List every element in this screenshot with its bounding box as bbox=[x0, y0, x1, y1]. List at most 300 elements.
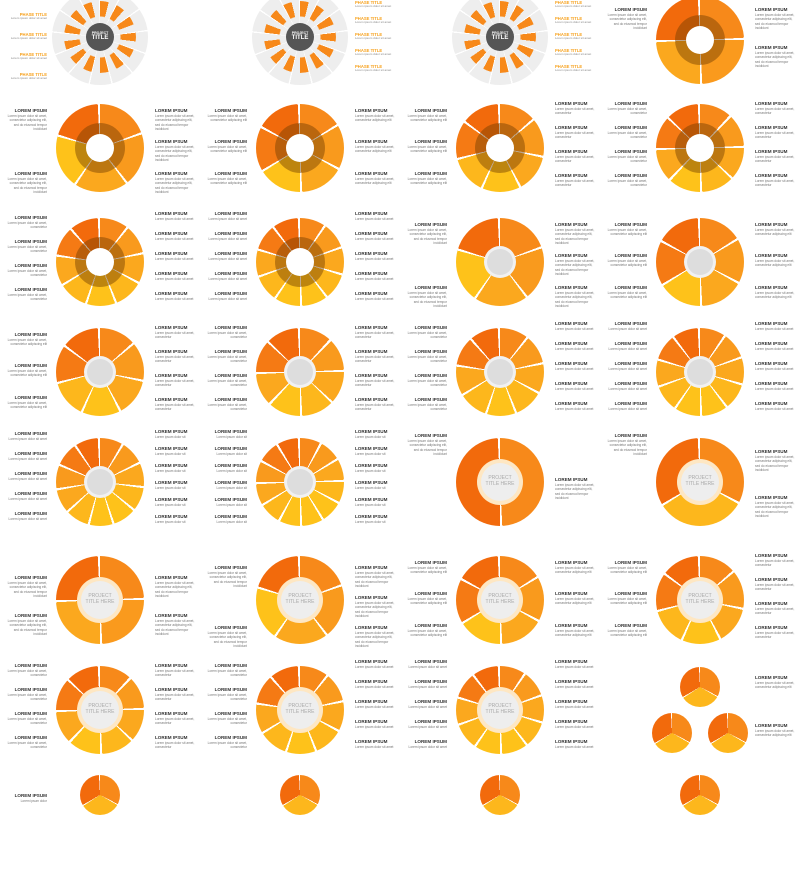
row 2: 9-segment star: Lorem ipsum dolor sit amet, consectetur bbox=[8, 221, 47, 229]
row 1: 8-segment star: LOREM IPSUM bbox=[755, 173, 787, 178]
row 1: 7-segment star: Lorem ipsum dolor sit amet, consectetur bbox=[555, 131, 594, 139]
row 3: 7-segment grey center: Lorem ipsum dolor sit amet, consectetur adipiscing elit bbox=[8, 401, 47, 409]
row 0: sun diagram 1: Lorem ipsum dolor sit amet bbox=[11, 76, 47, 80]
row 5: 5-segment project: Lorem ipsum dolor sit amet, consectetur adipiscing elit, sed do eiusmod tempor incididunt bbox=[355, 601, 394, 618]
row 2: 9-segment star: Lorem ipsum dolor sit amet bbox=[155, 217, 193, 221]
row 0: sun diagram 2 bbox=[252, 0, 392, 85]
row 4: 12-segment grey center: LOREM IPSUM bbox=[215, 463, 247, 468]
row 1: 5-segment star: Lorem ipsum dolor sit amet, consectetur adipiscing elit, sed do eiusmod tempor incididunt bbox=[8, 177, 47, 194]
row 5: 6-segment project: LOREM IPSUM bbox=[415, 623, 447, 628]
row 3: 10-segment grey center: LOREM IPSUM bbox=[615, 401, 647, 406]
row 6: 8-segment project: Lorem ipsum dolor sit amet, consectetur bbox=[155, 693, 194, 701]
row 5: 6-segment project: PROJECT bbox=[488, 593, 512, 599]
row 5: 6-segment project: Lorem ipsum dolor sit amet, consectetur adipiscing elit bbox=[408, 597, 447, 605]
row 4: 12-segment grey center: LOREM IPSUM bbox=[355, 463, 387, 468]
row 4: 12-segment grey center bbox=[214, 429, 388, 526]
row 1: 8-segment star: LOREM IPSUM bbox=[755, 125, 787, 130]
row 4: 11-segment grey center: LOREM IPSUM bbox=[15, 471, 47, 476]
row 5: 6-segment project: LOREM IPSUM bbox=[555, 591, 587, 596]
row 3: 9-segment grey center: Lorem ipsum dolor sit amet bbox=[555, 387, 593, 391]
row 1: 6-segment star: Lorem ipsum dolor sit amet, consectetur adipiscing elit bbox=[208, 145, 247, 153]
row 2: 9-segment star: LOREM IPSUM bbox=[155, 251, 187, 256]
row 2: 10-segment star: Lorem ipsum dolor sit amet bbox=[209, 277, 247, 281]
row 5: 6-segment project: Lorem ipsum dolor sit amet, consectetur adipiscing elit bbox=[555, 597, 594, 605]
row 5: 6-segment project bbox=[408, 556, 594, 644]
row 2: 10-segment star: LOREM IPSUM bbox=[215, 211, 247, 216]
row 4: 11-segment grey center: Lorem ipsum dolor sit amet bbox=[9, 497, 47, 501]
row 6: 9-segment project: Lorem ipsum dolor sit amet bbox=[355, 665, 393, 669]
row 6: small pie charts bbox=[652, 667, 794, 753]
row 6: 8-segment project: Lorem ipsum dolor sit amet, consectetur bbox=[155, 717, 194, 725]
row 0: sun diagram 3: PHASE TITLE bbox=[555, 0, 582, 5]
row 2: 5-segment grey center: Lorem ipsum dolor sit amet, consectetur adipiscing elit, sed do eiusmod tempor incididunt bbox=[555, 259, 594, 276]
row 2: 9-segment star: LOREM IPSUM bbox=[155, 291, 187, 296]
row 1: 8-segment star: Lorem ipsum dolor sit amet, consectetur bbox=[608, 131, 647, 139]
row 6: 8-segment project bbox=[8, 663, 194, 754]
row 5: 6-segment project: LOREM IPSUM bbox=[555, 623, 587, 628]
row 6: 9-segment project: LOREM IPSUM bbox=[215, 711, 247, 716]
row 2: 10-segment star: LOREM IPSUM bbox=[355, 211, 387, 216]
row 0: sun diagram 1 bbox=[11, 0, 148, 85]
row 2: 6-segment grey center: LOREM IPSUM bbox=[755, 222, 787, 227]
row 6: 8-segment project: LOREM IPSUM bbox=[15, 735, 47, 740]
row 2: 6-segment grey center: LOREM IPSUM bbox=[755, 285, 787, 290]
row 2: 10-segment star: Lorem ipsum dolor sit amet bbox=[209, 217, 247, 221]
row 3: 7-segment grey center: LOREM IPSUM bbox=[15, 395, 47, 400]
row 7: partial pies bbox=[14, 775, 720, 815]
row 4: 12-segment grey center: LOREM IPSUM bbox=[355, 446, 387, 451]
row 6: 10-segment project: PROJECT bbox=[488, 703, 512, 709]
row 0: sun diagram 3: PHASE TITLE bbox=[555, 32, 582, 37]
row 6: 9-segment project: LOREM IPSUM bbox=[355, 679, 387, 684]
row 3: 7-segment grey center: Lorem ipsum dolor sit amet, consectetur bbox=[155, 331, 194, 339]
row 6: 10-segment project: LOREM IPSUM bbox=[555, 719, 587, 724]
row 4: 12-segment grey center: LOREM IPSUM bbox=[355, 514, 387, 519]
row 5: 7-segment project: LOREM IPSUM bbox=[755, 553, 787, 558]
row 6: 10-segment project: Lorem ipsum dolor sit amet bbox=[409, 745, 447, 749]
row 3: 7-segment grey center: LOREM IPSUM bbox=[155, 397, 187, 402]
row 4: 3-segment project: PROJECT bbox=[688, 475, 712, 481]
row 4: 11-segment grey center: Lorem ipsum dolor sit bbox=[155, 452, 185, 456]
row 1: 7-segment star: Lorem ipsum dolor sit amet, consectetur adipiscing elit bbox=[408, 177, 447, 185]
row 6: 8-segment project: PROJECT bbox=[88, 703, 112, 709]
row 1: 7-segment star: Lorem ipsum dolor sit amet, consectetur adipiscing elit bbox=[408, 145, 447, 153]
row 2: 10-segment star: Lorem ipsum dolor sit amet bbox=[355, 257, 393, 261]
row 7: partial pies: Lorem ipsum dolor bbox=[21, 799, 47, 803]
row 5: 5-segment project: Lorem ipsum dolor sit amet, consectetur adipiscing elit, sed do eiusmod tempor incididunt bbox=[208, 571, 247, 588]
row 0: sun diagram 3: Lorem ipsum dolor sit amet bbox=[555, 36, 591, 40]
row 6: 8-segment project: Lorem ipsum dolor sit amet, consectetur bbox=[8, 717, 47, 725]
row 1: 5-segment star: Lorem ipsum dolor sit amet, consectetur adipiscing elit, sed do eiusmod tempor incididunt bbox=[8, 114, 47, 131]
row 4: 12-segment grey center: LOREM IPSUM bbox=[355, 429, 387, 434]
row 4: 11-segment grey center: Lorem ipsum dolor sit amet bbox=[9, 477, 47, 481]
row 5: 6-segment project: Lorem ipsum dolor sit amet, consectetur adipiscing elit bbox=[408, 629, 447, 637]
row 1: 6-segment star: Lorem ipsum dolor sit amet, consectetur adipiscing elit bbox=[355, 114, 394, 122]
row 2: 6-segment grey center: Lorem ipsum dolor sit amet, consectetur adipiscing elit bbox=[755, 259, 794, 267]
row 6: 10-segment project: Lorem ipsum dolor sit amet bbox=[555, 705, 593, 709]
row 5: 5-segment project: LOREM IPSUM bbox=[355, 625, 387, 630]
row 1: 5-segment star: Lorem ipsum dolor sit amet, consectetur adipiscing elit, sed do eiusmod tempor incididunt bbox=[155, 177, 194, 194]
row 1: 7-segment star: LOREM IPSUM bbox=[555, 149, 587, 154]
row 4: 11-segment grey center: LOREM IPSUM bbox=[155, 514, 187, 519]
row 3: 10-segment grey center: Lorem ipsum dolor sit amet bbox=[755, 367, 793, 371]
row 0: 4-segment star: Lorem ipsum dolor sit amet, consectetur adipiscing elit, sed do eiusmod tempor incididunt bbox=[755, 51, 794, 68]
row 5: 7-segment project: PROJECT bbox=[688, 593, 712, 599]
row 2: 9-segment star: LOREM IPSUM bbox=[15, 263, 47, 268]
row 6: 8-segment project: Lorem ipsum dolor sit amet, consectetur bbox=[8, 741, 47, 749]
row 0: sun diagram 3: Lorem ipsum dolor sit amet bbox=[555, 4, 591, 8]
row 2: 5-segment grey center: Lorem ipsum dolor sit amet, consectetur adipiscing elit, sed do eiusmod tempor incididunt bbox=[408, 291, 447, 308]
row 4: 11-segment grey center: Lorem ipsum dolor sit amet bbox=[9, 457, 47, 461]
row 6: 9-segment project: LOREM IPSUM bbox=[355, 719, 387, 724]
row 1: 8-segment star: Lorem ipsum dolor sit amet, consectetur bbox=[755, 107, 794, 115]
row 4: 2-segment project: PROJECT bbox=[488, 475, 512, 481]
row 4: 3-segment project: LOREM IPSUM bbox=[615, 433, 647, 438]
row 2: 5-segment grey center: Lorem ipsum dolor sit amet, consectetur adipiscing elit, sed do eiusmod tempor incididunt bbox=[408, 228, 447, 245]
row 4: 11-segment grey center: LOREM IPSUM bbox=[155, 429, 187, 434]
row 4: 12-segment grey center: Lorem ipsum dolor sit bbox=[355, 520, 385, 524]
row 0: sun diagram 3: Lorem ipsum dolor sit amet bbox=[555, 68, 591, 72]
row 5: 4-segment project: PROJECT bbox=[88, 593, 112, 599]
row 1: 5-segment star: LOREM IPSUM bbox=[155, 171, 187, 176]
row 1: 8-segment star: Lorem ipsum dolor sit amet, consectetur bbox=[608, 155, 647, 163]
row 1: 8-segment star: LOREM IPSUM bbox=[615, 101, 647, 106]
row 5: 5-segment project: Lorem ipsum dolor sit amet, consectetur adipiscing elit, sed do eiusmod tempor incididunt bbox=[355, 571, 394, 588]
row 6: small pie charts: LOREM IPSUM bbox=[755, 675, 787, 680]
row 6: 8-segment project: Lorem ipsum dolor sit amet, consectetur bbox=[155, 669, 194, 677]
row 3: 10-segment grey center bbox=[608, 321, 794, 416]
row 4: 11-segment grey center: Lorem ipsum dolor sit bbox=[155, 486, 185, 490]
row 6: small pie charts: LOREM IPSUM bbox=[755, 723, 787, 728]
row 4: 12-segment grey center: LOREM IPSUM bbox=[215, 429, 247, 434]
row 2: 9-segment star: LOREM IPSUM bbox=[15, 215, 47, 220]
row 5: 4-segment project: Lorem ipsum dolor sit amet, consectetur adipiscing elit, sed do eiusmod tempor incididunt bbox=[8, 581, 47, 598]
row 3: 9-segment grey center: Lorem ipsum dolor sit amet, consectetur bbox=[408, 355, 447, 363]
row 0: sun diagram 1: Lorem ipsum dolor sit amet bbox=[11, 36, 47, 40]
row 1: 6-segment star: LOREM IPSUM bbox=[355, 108, 387, 113]
row 5: 6-segment project: Lorem ipsum dolor sit amet, consectetur adipiscing elit bbox=[555, 629, 594, 637]
row 5: 7-segment project: Lorem ipsum dolor sit amet, consectetur adipiscing elit bbox=[608, 566, 647, 574]
row 0: sun diagram 1: PHASE TITLE bbox=[20, 12, 47, 17]
row 1: 8-segment star: Lorem ipsum dolor sit amet, consectetur bbox=[608, 179, 647, 187]
row 2: 6-segment grey center: Lorem ipsum dolor sit amet, consectetur adipiscing elit bbox=[755, 228, 794, 236]
row 3: 10-segment grey center: LOREM IPSUM bbox=[615, 361, 647, 366]
row 0: sun diagram 3: TITLE bbox=[492, 35, 508, 41]
row 4: 11-segment grey center: LOREM IPSUM bbox=[155, 463, 187, 468]
row 3: 9-segment grey center: LOREM IPSUM bbox=[555, 361, 587, 366]
row 2: 9-segment star: Lorem ipsum dolor sit amet, consectetur bbox=[8, 269, 47, 277]
row 3: 8-segment grey center: LOREM IPSUM bbox=[355, 325, 387, 330]
row 3: 9-segment grey center: LOREM IPSUM bbox=[415, 397, 447, 402]
row 6: 9-segment project: Lorem ipsum dolor sit amet bbox=[355, 705, 393, 709]
row 2: 10-segment star: LOREM IPSUM bbox=[355, 271, 387, 276]
row 3: 8-segment grey center: LOREM IPSUM bbox=[215, 349, 247, 354]
row 3: 8-segment grey center: Lorem ipsum dolor sit amet, consectetur bbox=[355, 331, 394, 339]
row 6: 8-segment project: Lorem ipsum dolor sit amet, consectetur bbox=[155, 741, 194, 749]
row 5: 6-segment project: LOREM IPSUM bbox=[415, 560, 447, 565]
row 5: 7-segment project: Lorem ipsum dolor sit amet, consectetur bbox=[755, 607, 794, 615]
row 1: 5-segment star: Lorem ipsum dolor sit amet, consectetur adipiscing elit, sed do eiusmod tempor incididunt bbox=[155, 114, 194, 131]
row 1: 8-segment star: Lorem ipsum dolor sit amet, consectetur bbox=[755, 179, 794, 187]
row 3: 9-segment grey center: LOREM IPSUM bbox=[555, 341, 587, 346]
row 3: 7-segment grey center: LOREM IPSUM bbox=[15, 363, 47, 368]
row 1: 7-segment star: Lorem ipsum dolor sit amet, consectetur bbox=[555, 107, 594, 115]
row 6: 8-segment project: LOREM IPSUM bbox=[15, 687, 47, 692]
row 5: 4-segment project: Lorem ipsum dolor sit amet, consectetur adipiscing elit, sed do eiusmod tempor incididunt bbox=[155, 619, 194, 636]
row 4: 3-segment project: Lorem ipsum dolor sit amet, consectetur adipiscing elit, sed do eiusmod tempor incididunt bbox=[755, 455, 794, 472]
row 6: 8-segment project: LOREM IPSUM bbox=[155, 687, 187, 692]
row 4: 2-segment project: Lorem ipsum dolor sit amet, consectetur adipiscing elit, sed do eiusmod tempor incididunt bbox=[555, 483, 594, 500]
row 6: 9-segment project: PROJECT bbox=[288, 703, 312, 709]
row 4: 2-segment project bbox=[408, 433, 594, 526]
row 3: 9-segment grey center: Lorem ipsum dolor sit amet bbox=[555, 367, 593, 371]
row 2: 6-segment grey center: Lorem ipsum dolor sit amet, consectetur adipiscing elit bbox=[608, 291, 647, 299]
row 4: 12-segment grey center: Lorem ipsum dolor sit bbox=[217, 469, 247, 473]
row 2: 9-segment star: LOREM IPSUM bbox=[15, 287, 47, 292]
row 2: 9-segment star: LOREM IPSUM bbox=[155, 271, 187, 276]
row 4: 3-segment project: Lorem ipsum dolor sit amet, consectetur adipiscing elit, sed do eiusmod tempor incididunt bbox=[608, 439, 647, 456]
row 5: 4-segment project: Lorem ipsum dolor sit amet, consectetur adipiscing elit, sed do eiusmod tempor incididunt bbox=[155, 581, 194, 598]
row 0: sun diagram 2: PHASE TITLE bbox=[355, 0, 382, 5]
row 0: sun diagram 1: PHASE TITLE bbox=[20, 52, 47, 57]
row 4: 12-segment grey center: Lorem ipsum dolor sit bbox=[217, 435, 247, 439]
row 1: 5-segment star: Lorem ipsum dolor sit amet, consectetur adipiscing elit, sed do eiusmod tempor incididunt bbox=[155, 145, 194, 162]
row 4: 11-segment grey center: Lorem ipsum dolor sit bbox=[155, 435, 185, 439]
row 0: sun diagram 2: Lorem ipsum dolor sit amet bbox=[355, 20, 391, 24]
row 0: sun diagram 1: Lorem ipsum dolor sit amet bbox=[11, 16, 47, 20]
row 3: 8-segment grey center bbox=[208, 325, 394, 416]
row 1: 8-segment star: LOREM IPSUM bbox=[615, 173, 647, 178]
row 6: 9-segment project: LOREM IPSUM bbox=[355, 659, 387, 664]
row 0: sun diagram 2: PHASE TITLE bbox=[355, 32, 382, 37]
row 2: 6-segment grey center: Lorem ipsum dolor sit amet, consectetur adipiscing elit bbox=[608, 228, 647, 236]
row 5: 4-segment project: Lorem ipsum dolor sit amet, consectetur adipiscing elit, sed do eiusmod tempor incididunt bbox=[8, 619, 47, 636]
row 6: 9-segment project: Lorem ipsum dolor sit amet, consectetur bbox=[208, 717, 247, 725]
row 6: 9-segment project: Lorem ipsum dolor sit amet bbox=[355, 685, 393, 689]
row 3: 7-segment grey center: Lorem ipsum dolor sit amet, consectetur bbox=[155, 355, 194, 363]
row 4: 12-segment grey center: LOREM IPSUM bbox=[215, 497, 247, 502]
row 0: sun diagram 2: PHASE TITLE bbox=[355, 16, 382, 21]
row 0: sun diagram 1: PHASE TITLE bbox=[20, 32, 47, 37]
row 3: 9-segment grey center: Lorem ipsum dolor sit amet, consectetur bbox=[408, 403, 447, 411]
row 6: 10-segment project: LOREM IPSUM bbox=[415, 679, 447, 684]
row 5: 5-segment project: LOREM IPSUM bbox=[215, 565, 247, 570]
row 4: 3-segment project: LOREM IPSUM bbox=[755, 449, 787, 454]
row 6: 8-segment project: Lorem ipsum dolor sit amet, consectetur bbox=[8, 693, 47, 701]
row 4: 11-segment grey center: Lorem ipsum dolor sit bbox=[155, 503, 185, 507]
row 6: 10-segment project bbox=[408, 659, 594, 754]
row 1: 7-segment star: LOREM IPSUM bbox=[415, 108, 447, 113]
row 1: 7-segment star: LOREM IPSUM bbox=[415, 171, 447, 176]
row 5: 7-segment project: LOREM IPSUM bbox=[755, 577, 787, 582]
row 3: 10-segment grey center: LOREM IPSUM bbox=[755, 361, 787, 366]
row 4: 12-segment grey center: LOREM IPSUM bbox=[215, 446, 247, 451]
row 5: 7-segment project: Lorem ipsum dolor sit amet, consectetur adipiscing elit bbox=[608, 597, 647, 605]
row 6: 10-segment project: LOREM IPSUM bbox=[415, 719, 447, 724]
row 6: 9-segment project: LOREM IPSUM bbox=[355, 699, 387, 704]
row 2: 9-segment star: Lorem ipsum dolor sit amet bbox=[155, 257, 193, 261]
row 3: 9-segment grey center: LOREM IPSUM bbox=[555, 401, 587, 406]
row 6: 10-segment project: LOREM IPSUM bbox=[555, 659, 587, 664]
row 4: 12-segment grey center: LOREM IPSUM bbox=[355, 480, 387, 485]
row 5: 7-segment project: LOREM IPSUM bbox=[615, 560, 647, 565]
row 4: 12-segment grey center: Lorem ipsum dolor sit bbox=[355, 486, 385, 490]
row 2: 6-segment grey center: LOREM IPSUM bbox=[615, 285, 647, 290]
row 3: 10-segment grey center: Lorem ipsum dolor sit amet bbox=[755, 327, 793, 331]
row 6: 10-segment project: Lorem ipsum dolor sit amet bbox=[409, 685, 447, 689]
row 5: 5-segment project: TITLE HERE bbox=[286, 599, 314, 605]
row 1: 8-segment star: Lorem ipsum dolor sit amet, consectetur bbox=[755, 131, 794, 139]
row 3: 10-segment grey center: Lorem ipsum dolor sit amet bbox=[609, 407, 647, 411]
row 2: 9-segment star: Lorem ipsum dolor sit amet, consectetur bbox=[8, 293, 47, 301]
row 2: 10-segment star: Lorem ipsum dolor sit amet bbox=[209, 237, 247, 241]
row 3: 9-segment grey center: LOREM IPSUM bbox=[415, 325, 447, 330]
row 0: 4-segment star bbox=[608, 0, 794, 84]
row 4: 11-segment grey center: LOREM IPSUM bbox=[155, 446, 187, 451]
row 5: 4-segment project: LOREM IPSUM bbox=[155, 575, 187, 580]
row 6: 10-segment project: Lorem ipsum dolor sit amet bbox=[555, 685, 593, 689]
row 5: 7-segment project: LOREM IPSUM bbox=[755, 625, 787, 630]
row 0: sun diagram 1: PROJECT bbox=[92, 31, 108, 35]
row 6: 9-segment project: LOREM IPSUM bbox=[215, 735, 247, 740]
row 2: 6-segment grey center: Lorem ipsum dolor sit amet, consectetur adipiscing elit bbox=[755, 291, 794, 299]
row 1: 7-segment star bbox=[408, 101, 594, 192]
row 3: 10-segment grey center: LOREM IPSUM bbox=[755, 381, 787, 386]
row 4: 12-segment grey center: Lorem ipsum dolor sit bbox=[355, 435, 385, 439]
row 0: sun diagram 1: Lorem ipsum dolor sit amet bbox=[11, 56, 47, 60]
row 3: 9-segment grey center: Lorem ipsum dolor sit amet, consectetur bbox=[408, 331, 447, 339]
row 0: 4-segment star: LOREM IPSUM bbox=[755, 45, 787, 50]
row 2: 9-segment star: Lorem ipsum dolor sit amet, consectetur bbox=[8, 245, 47, 253]
row 3: 9-segment grey center bbox=[408, 321, 594, 416]
row 4: 3-segment project: Lorem ipsum dolor sit amet, consectetur adipiscing elit, sed do eiusmod tempor incididunt bbox=[755, 501, 794, 518]
row 4: 2-segment project: LOREM IPSUM bbox=[555, 477, 587, 482]
row 0: 4-segment star: LOREM IPSUM bbox=[755, 7, 787, 12]
row 6: 8-segment project: LOREM IPSUM bbox=[155, 711, 187, 716]
row 6: 10-segment project: LOREM IPSUM bbox=[555, 739, 587, 744]
row 5: 7-segment project: LOREM IPSUM bbox=[755, 601, 787, 606]
row 1: 6-segment star: LOREM IPSUM bbox=[215, 108, 247, 113]
row 1: 6-segment star: Lorem ipsum dolor sit amet, consectetur adipiscing elit bbox=[208, 114, 247, 122]
row 2: 6-segment grey center: Lorem ipsum dolor sit amet, consectetur adipiscing elit bbox=[608, 259, 647, 267]
row 0: sun diagram 2: Lorem ipsum dolor sit amet bbox=[355, 52, 391, 56]
row 3: 7-segment grey center: Lorem ipsum dolor sit amet, consectetur bbox=[155, 379, 194, 387]
row 6: 9-segment project: LOREM IPSUM bbox=[215, 663, 247, 668]
row 3: 8-segment grey center: LOREM IPSUM bbox=[355, 373, 387, 378]
row 0: sun diagram 3 bbox=[452, 0, 592, 85]
row 6: 10-segment project: LOREM IPSUM bbox=[555, 679, 587, 684]
row 2: 10-segment star: Lorem ipsum dolor sit amet bbox=[355, 237, 393, 241]
row 5: 6-segment project: TITLE HERE bbox=[486, 599, 514, 605]
row 5: 6-segment project: LOREM IPSUM bbox=[555, 560, 587, 565]
row 1: 6-segment star: LOREM IPSUM bbox=[215, 139, 247, 144]
row 2: 6-segment grey center: LOREM IPSUM bbox=[755, 253, 787, 258]
row 6: 10-segment project: TITLE HERE bbox=[486, 709, 514, 715]
row 0: sun diagram 3: Lorem ipsum dolor sit amet bbox=[555, 20, 591, 24]
row 6: 9-segment project: LOREM IPSUM bbox=[215, 687, 247, 692]
row 3: 10-segment grey center: LOREM IPSUM bbox=[615, 341, 647, 346]
row 3: 8-segment grey center: LOREM IPSUM bbox=[215, 325, 247, 330]
row 0: sun diagram 2: PROJECT bbox=[292, 31, 308, 35]
row 4: 12-segment grey center: LOREM IPSUM bbox=[355, 497, 387, 502]
row 6: 10-segment project: Lorem ipsum dolor sit amet bbox=[555, 725, 593, 729]
row 6: 8-segment project: LOREM IPSUM bbox=[155, 735, 187, 740]
row 6: 10-segment project: LOREM IPSUM bbox=[415, 739, 447, 744]
row 4: 12-segment grey center: Lorem ipsum dolor sit bbox=[355, 469, 385, 473]
row 1: 7-segment star: LOREM IPSUM bbox=[555, 173, 587, 178]
row 3: 7-segment grey center: LOREM IPSUM bbox=[15, 332, 47, 337]
row 1: 6-segment star: LOREM IPSUM bbox=[355, 171, 387, 176]
row 6: 9-segment project: Lorem ipsum dolor sit amet bbox=[355, 745, 393, 749]
row 1: 8-segment star bbox=[608, 101, 794, 192]
row 5: 5-segment project: LOREM IPSUM bbox=[355, 565, 387, 570]
row 4: 11-segment grey center: LOREM IPSUM bbox=[155, 497, 187, 502]
row 3: 7-segment grey center: LOREM IPSUM bbox=[155, 373, 187, 378]
row 3: 8-segment grey center: Lorem ipsum dolor sit amet, consectetur bbox=[355, 355, 394, 363]
row 2: 9-segment star: LOREM IPSUM bbox=[155, 211, 187, 216]
row 4: 11-segment grey center: Lorem ipsum dolor sit amet bbox=[9, 437, 47, 441]
row 5: 5-segment project bbox=[208, 556, 394, 648]
row 0: 4-segment star: Lorem ipsum dolor sit amet, consectetur adipiscing elit, sed do eiusmod tempor incididunt bbox=[755, 13, 794, 30]
row 3: 8-segment grey center: Lorem ipsum dolor sit amet, consectetur bbox=[208, 331, 247, 339]
row 2: 9-segment star: Lorem ipsum dolor sit amet bbox=[155, 297, 193, 301]
row 4: 12-segment grey center: Lorem ipsum dolor sit bbox=[217, 452, 247, 456]
row 3: 9-segment grey center: Lorem ipsum dolor sit amet, consectetur bbox=[408, 379, 447, 387]
row 3: 8-segment grey center: LOREM IPSUM bbox=[215, 397, 247, 402]
row 2: 9-segment star bbox=[8, 211, 194, 306]
row 2: 10-segment star: Lorem ipsum dolor sit amet bbox=[209, 257, 247, 261]
row 5: 5-segment project: PROJECT bbox=[288, 593, 312, 599]
row 3: 7-segment grey center: Lorem ipsum dolor sit amet, consectetur adipiscing elit bbox=[8, 338, 47, 346]
row 6: 8-segment project: Lorem ipsum dolor sit amet, consectetur bbox=[8, 669, 47, 677]
row 4: 2-segment project: TITLE HERE bbox=[486, 481, 514, 487]
row 3: 9-segment grey center: Lorem ipsum dolor sit amet bbox=[555, 327, 593, 331]
row 0: sun diagram 2: Lorem ipsum dolor sit amet bbox=[355, 36, 391, 40]
row 5: 7-segment project: Lorem ipsum dolor sit amet, consectetur bbox=[755, 631, 794, 639]
row 6: 10-segment project: Lorem ipsum dolor sit amet bbox=[409, 665, 447, 669]
row 0: sun diagram 1: PHASE TITLE bbox=[20, 72, 47, 77]
row 7: partial pies: LOREM IPSUM bbox=[15, 793, 47, 798]
row 2: 9-segment star: Lorem ipsum dolor sit amet bbox=[155, 237, 193, 241]
row 1: 7-segment star: LOREM IPSUM bbox=[555, 101, 587, 106]
row 6: 10-segment project: Lorem ipsum dolor sit amet bbox=[409, 705, 447, 709]
row 0: sun diagram 3: Lorem ipsum dolor sit amet bbox=[555, 52, 591, 56]
row 5: 7-segment project: Lorem ipsum dolor sit amet, consectetur bbox=[755, 583, 794, 591]
row 1: 6-segment star: Lorem ipsum dolor sit amet, consectetur adipiscing elit bbox=[208, 177, 247, 185]
row 2: 10-segment star: LOREM IPSUM bbox=[355, 231, 387, 236]
row 3: 8-segment grey center: LOREM IPSUM bbox=[215, 373, 247, 378]
row 5: 7-segment project: TITLE HERE bbox=[686, 599, 714, 605]
row 3: 9-segment grey center: Lorem ipsum dolor sit amet bbox=[555, 407, 593, 411]
row 1: 8-segment star: Lorem ipsum dolor sit amet, consectetur bbox=[755, 155, 794, 163]
row 1: 6-segment star: Lorem ipsum dolor sit amet, consectetur adipiscing elit bbox=[355, 145, 394, 153]
row 0: 4-segment star: LOREM IPSUM bbox=[615, 7, 647, 12]
row 6: small pie charts: Lorem ipsum dolor sit amet, consectetur adipiscing elit bbox=[755, 729, 794, 737]
row 3: 8-segment grey center: Lorem ipsum dolor sit amet, consectetur bbox=[208, 403, 247, 411]
row 2: 10-segment star: Lorem ipsum dolor sit amet bbox=[209, 297, 247, 301]
row 6: 9-segment project bbox=[208, 659, 394, 754]
row 1: 7-segment star: LOREM IPSUM bbox=[555, 125, 587, 130]
row 3: 10-segment grey center: Lorem ipsum dolor sit amet bbox=[755, 407, 793, 411]
row 3: 7-segment grey center: LOREM IPSUM bbox=[155, 349, 187, 354]
row 1: 6-segment star: LOREM IPSUM bbox=[215, 171, 247, 176]
row 1: 8-segment star: LOREM IPSUM bbox=[615, 125, 647, 130]
row 6: 9-segment project: Lorem ipsum dolor sit amet, consectetur bbox=[208, 669, 247, 677]
row 3: 10-segment grey center: LOREM IPSUM bbox=[615, 381, 647, 386]
row 5: 4-segment project: LOREM IPSUM bbox=[15, 575, 47, 580]
row 3: 8-segment grey center: Lorem ipsum dolor sit amet, consectetur bbox=[355, 403, 394, 411]
row 3: 7-segment grey center: Lorem ipsum dolor sit amet, consectetur bbox=[155, 403, 194, 411]
